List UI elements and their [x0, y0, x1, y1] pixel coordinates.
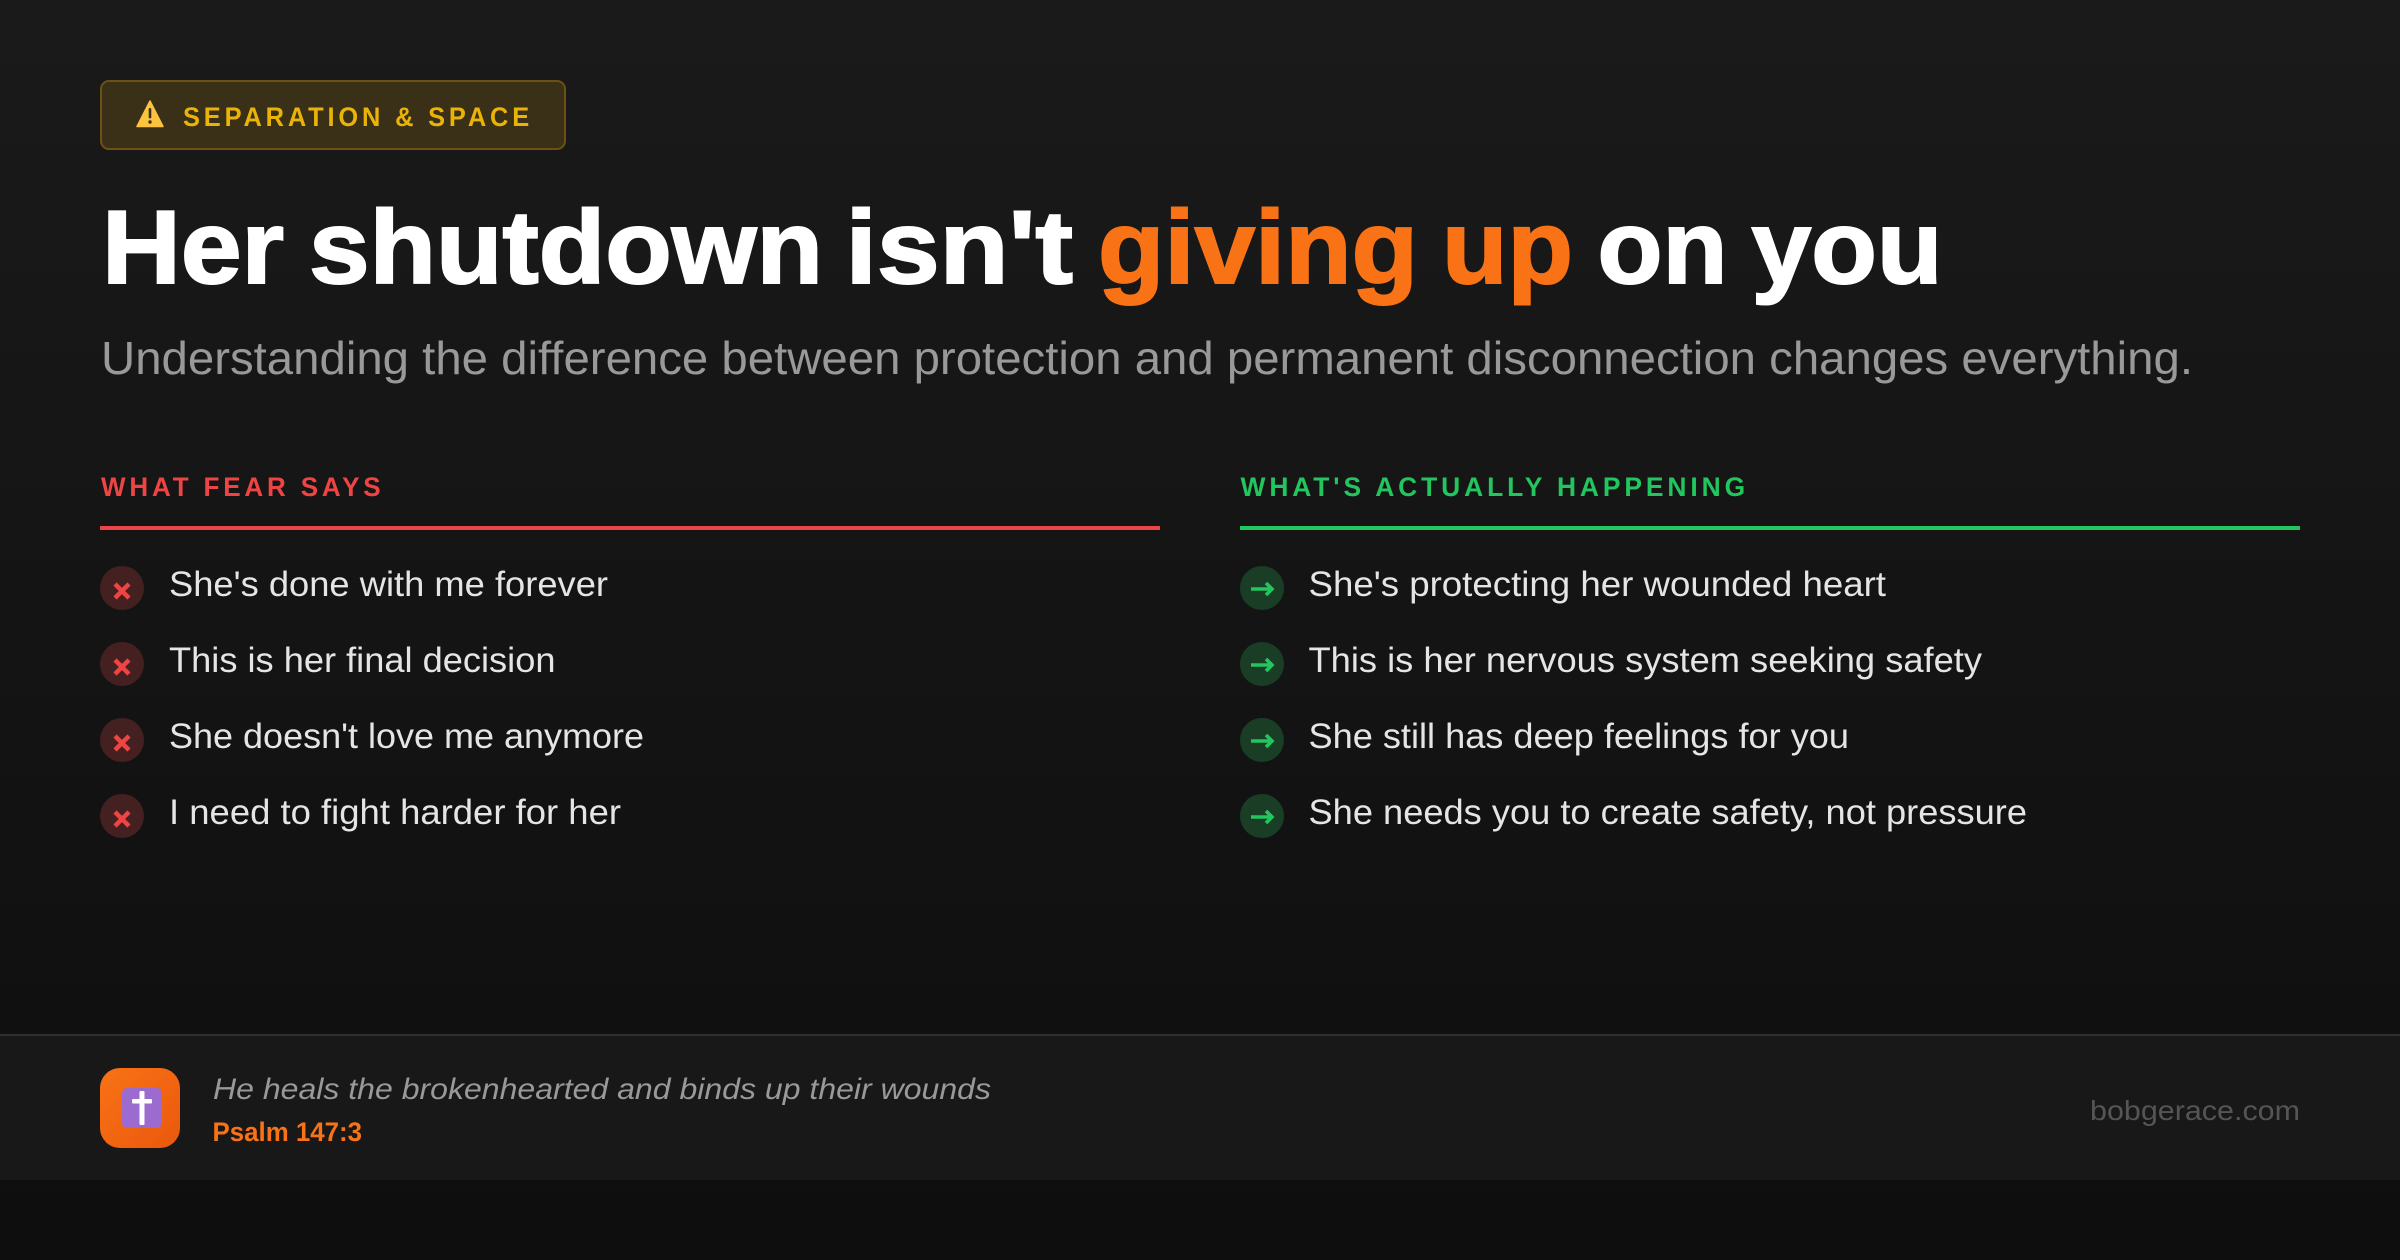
reality item 4: She needs you to create safety, not pressure [1308, 793, 2027, 832]
panel: what's actually happening [1240, 472, 2300, 838]
title: up [1442, 190, 1573, 306]
icon: cross on purple tile [100, 1068, 180, 1148]
title: Her [102, 190, 284, 306]
title: shutdown [309, 190, 823, 306]
reality item 1: She's protecting her wounded heart [1308, 565, 1886, 604]
title: isn't [846, 190, 1073, 306]
icon: warning triangle [137, 101, 163, 126]
title: giving [1098, 190, 1418, 306]
reality item 3: She still has deep feelings for you [1308, 717, 1849, 756]
title [102, 190, 1942, 306]
reality item 2: This is her nervous system seeking safety [1308, 641, 1983, 680]
title: on [1598, 190, 1728, 306]
badge label: SEPARATION & SPACE [183, 102, 533, 132]
fear item 1: She's done with me forever [169, 565, 608, 604]
title: you [1752, 190, 1942, 306]
badge: separation and space [101, 81, 565, 149]
scripture reference: Psalm 147:3 [212, 1117, 362, 1147]
fear item 3: She doesn't love me anymore [169, 717, 644, 756]
website: bobgerace.com [2090, 1095, 2300, 1126]
fear item 2: This is her final decision [169, 641, 556, 680]
fear item 4: I need to fight harder for her [169, 793, 621, 832]
footer bar [0, 1034, 2400, 1180]
column heading: fear: WHAT FEAR SAYS [101, 472, 384, 502]
panel: what fear says [100, 472, 1160, 838]
column heading: reality: WHAT'S ACTUALLY HAPPENING [1240, 472, 1749, 502]
subtitle: Understanding the difference between protection and permanent disconnection changes everything. [101, 332, 2193, 384]
scripture quote: He heals the brokenhearted and binds up their wounds [213, 1073, 991, 1106]
